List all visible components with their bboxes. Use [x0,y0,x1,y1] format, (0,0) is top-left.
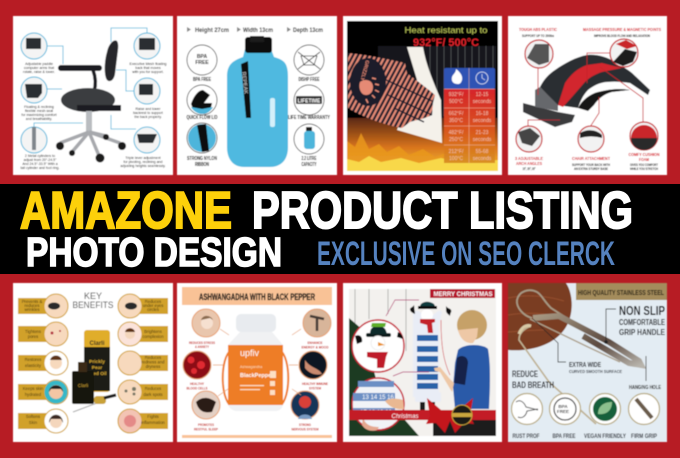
dimensions: Depth 13cm [293,27,323,34]
benefit label text: Skin [29,420,38,425]
benefit label text: Reduces [145,386,161,391]
product: prickly pear oil: Seed Oil [87,371,107,377]
chair captions: with you for support. [132,70,164,74]
chair captions: computer arms that [24,66,54,70]
chair captions: for maximizing comfort [21,113,57,117]
callout: non slip: NON SLIP [619,303,665,318]
product: supplement bottle: BlackPepper [240,373,274,379]
benefit label text [22,299,166,425]
callout: extra wide: CURVED SMOOTH SURFACE [569,369,622,374]
heading: KEY [84,291,102,301]
icon: bottle: REPEAK [240,72,248,95]
benefit label text: pores [28,334,38,339]
stretcher captions: ARCH ANGLES [516,161,542,166]
benefit label text: Keeps skin [23,386,44,391]
heading: Heat resistant up to [404,25,488,35]
heat table: 500°C [449,99,463,105]
panel: water bottle: BPA [197,54,207,60]
benefit labels [18,298,168,429]
panel: tongue scraper: BPA [558,404,568,409]
callout: extra wide [533,319,622,374]
feature captions: RUST PROF [512,434,540,440]
feature captions: PROMOTES [198,422,214,427]
chair captions: back that moves [135,66,161,70]
chair captions: Raise and lower [135,107,161,111]
zoom circle: calendar: 17 18 19 20 [360,410,393,416]
bottle captions: BPA FREE [193,77,211,83]
stretcher captions: SUPPORT YOUR BACK WITH [572,163,611,167]
icon: oven glove [348,53,435,128]
stretcher captions [515,27,661,171]
icon: chair detail circles [21,33,160,153]
stretcher captions: CHAIR ATTACHMENT [572,156,610,161]
chair captions: backrest to support [133,111,163,115]
heat table: seconds [473,99,492,105]
grill background [378,46,496,126]
stretcher captions: SUPPORT UP TO 200lbs [522,34,554,38]
dimensions [187,27,323,34]
callout lines [34,28,147,129]
heat table: seconds [473,137,492,143]
boy [434,310,490,409]
zoom circle: calendar [352,378,404,431]
stretcher captions: TOUGH ABS PLASTIC [519,27,558,32]
product: supplement bottle [228,314,283,411]
stretcher captions: IMPROVE BLOOD FLOW AND RELAXATION [594,34,651,38]
chair captions: flexible mesh seat [25,109,53,113]
heat table: 12-15 [476,92,489,98]
bottle captions: STRONG NYLON [187,156,217,162]
title banner [0,182,680,275]
benefit label text: dryness [146,364,160,369]
feature captions: FIRM GRIP [631,434,657,440]
feature captions: VEGAN FRIENDLY [584,434,626,440]
chair captions: and breathability. [26,117,52,121]
wooden board [508,283,572,350]
panel: christmas calendar: MERRY CHRISTMAS [434,292,492,298]
callout: hanging hole: HANGING HOLE [629,385,662,391]
product: prickly pear oil: Prickly [89,359,105,365]
chair captions: Executive Mesh floating [130,62,167,66]
benefit label text: Restores [25,357,41,362]
feature captions: STRONG [299,422,311,427]
icon: bottle [227,36,288,167]
stretcher captions: AN EXTRA STURDY BASE [574,167,608,171]
panel: ashwagandha [177,283,337,442]
feature captions: & ANXIETY [195,344,209,349]
chair captions [21,62,167,170]
heat table: seconds [473,118,492,124]
heat table [444,68,495,163]
product: supplement bottle: upfiv [240,348,260,358]
panel: water bottle: FREE [195,60,209,66]
feature captions: NERVOUS SYSTEM [292,426,319,432]
callout: non slip: COMFORTABLE [619,318,665,327]
icon: oven glove: GRIZZLY [358,59,370,82]
flames [347,118,498,171]
stretcher captions: WHILE YOU STRETCH [630,167,659,171]
panel: back stretcher [508,16,667,175]
panel: tongue scraper [508,283,667,442]
callout lines [528,53,643,127]
stretcher detail circles [516,39,658,152]
lights strings [355,289,406,351]
text: reduce bad breath [512,369,554,390]
tree [349,318,419,436]
stretcher captions: COMFY CUSHION [628,152,660,157]
stretcher captions: 15°, 25°, 35° [522,167,536,171]
chair captions: 2 Metal cylinders to [25,154,55,158]
benefit label text: dark spots [143,392,163,397]
heading: 932°F/ 500°C [413,37,479,49]
bottle captions: 2.2 LITRE [302,156,317,162]
product: supplement bottle: Ashwagandha [240,365,262,369]
heat table: 350°C [449,118,463,124]
feature captions: REDUCES STRESS [189,340,215,345]
product: prickly pear oil: Pear [92,365,102,371]
zoom circle: snowman [352,320,404,372]
title: amazone: AMAZONE [20,182,232,240]
banner: high quality [576,283,667,300]
arms [223,350,288,406]
stretcher captions: FOAM [639,157,649,162]
benefit label text: Reduces [145,299,161,304]
heading [72,291,114,310]
panel: heat resistant glove [343,16,502,175]
product: prickly pear oil: Clarli [89,341,105,347]
heat table: seconds [473,156,492,162]
panel: christmas calendar [343,283,502,442]
chair captions: Triple lever adjustment [125,156,161,160]
connector lines [386,300,429,376]
benefit circles [44,294,142,433]
stretcher captions: GIVES YOU COMFORT [630,163,658,167]
heat table: 55-68 [476,149,489,155]
callout: non slip [604,303,665,344]
title: photo design: PHOTO DESIGN [26,229,282,275]
zoom circle: calendar: 13 14 15 16 [362,395,395,401]
chair captions: Adjustable paddle [25,62,53,66]
benefit label text: inflammation [141,420,166,425]
feature icons [512,394,660,424]
heat table: 100°C [449,156,463,162]
banner: merry christmas [430,289,495,298]
benefit label text: Softens [26,414,40,419]
stretcher captions: 3 ADJUSTABLE [515,156,543,161]
chair captions: And 24.5"-33.5" With a [22,162,58,166]
feature captions [186,340,329,432]
heat table: 21-23 [476,130,489,136]
product: prickly pear oil: Clarli [78,383,88,388]
product: tongue scraper [517,290,641,424]
benefit label text: circles [147,307,159,312]
benefit label text: complexion [142,334,164,339]
panel: water bottle: LIFETIME [298,98,321,104]
chair captions: Floating & reclining [24,105,54,109]
feature captions: RESTFUL SLEEP [194,426,218,432]
text: reduce bad breath: REDUCE [512,369,538,379]
heat table: 250°C [449,137,463,143]
chair captions: for pivoting, reclining and [124,160,163,164]
product: prickly pear oil [72,330,116,412]
white cloth [397,47,442,143]
chair captions: tall cylinder and foot ring. [21,166,59,170]
heat table: 662°F/ [449,111,464,117]
bottle captions: RIBBON [195,162,209,168]
stretcher captions: MASSAGE PRESSURE & MAGNETIC POINTS [583,27,661,32]
benefit label text: elasticity [25,363,42,368]
bottle captions [186,77,331,168]
callout: non slip: GRIP HANDLE [619,327,665,337]
chair captions: the back properly. [134,115,162,119]
bottle captions: QUICK FLOW LID [186,115,218,121]
panel: key benefits [13,283,173,442]
benefit label text: redness and [141,360,165,364]
floor [433,420,496,436]
connector arrows [213,329,301,396]
dimensions: Width 13cm [243,27,273,34]
heat table: 16-18 [476,111,489,117]
feature captions: ENHANCE [308,340,323,345]
heat table: 482°F/ [449,130,464,136]
bottle captions: CAPACITY [302,162,317,168]
bottle captions: DISHP FREE [298,77,320,83]
heading [182,287,332,305]
benefit label text: reduces [25,303,39,308]
chair captions: adjust from 20"-24.5" [24,158,57,162]
feature captions: HEALTHY [190,381,204,386]
feature captions: HEALTHY IMMUNE [302,381,328,386]
benefit label text: Brightens [144,329,162,334]
heat table: 212°F/ [449,149,464,155]
christmas ribbon [349,410,496,420]
dimensions: Height 27cm [195,27,229,34]
benefit label text: under eyes [143,303,163,308]
feature captions: SYSTEM [309,386,321,390]
heat table: 932°F/ [449,92,464,98]
icon: chair [56,40,126,162]
bottle captions: LIFE TIME WARRANTY [288,115,331,121]
feature captions: BLOOD CELLS [186,386,208,390]
heading [404,25,488,49]
benefit label text: Tightens [25,329,41,334]
callout: extra wide: EXTRA WIDE [569,362,601,369]
heading: BENEFITS [72,300,114,310]
bottle feature circles [187,45,324,154]
feature captions: ENERGY & MOOD [302,344,329,350]
benefit label text: hydrated [25,392,42,397]
panel: christmas calendar: Christmas [391,414,419,420]
benefit label text: wrinkles [24,307,40,312]
benefit label text: Prevents & [22,299,42,304]
text: reduce bad breath: BAD BREATH [512,380,554,390]
panel: ergonomic chair [13,16,173,175]
feature circles [183,309,331,419]
benefit label text: Fights [147,414,159,419]
badge: red bow [426,398,474,433]
panel: ashwagandha: ASHWANGADHA WITH BLACK PEPPER [199,292,315,302]
callout: hanging hole [629,356,662,391]
chair captions: rotate, raise & lower. [23,70,55,74]
product: snowman advent calendar [410,302,451,410]
feature captions [512,434,657,440]
feature captions: BPA FREE [552,434,576,440]
panel: water bottle [177,16,337,175]
benefit label text: Reduces [145,355,161,360]
icon: back stretcher device [523,55,650,127]
panel: tongue scraper: FREE [557,409,569,414]
chair captions: adjusting heights seamlessly. [120,164,166,168]
